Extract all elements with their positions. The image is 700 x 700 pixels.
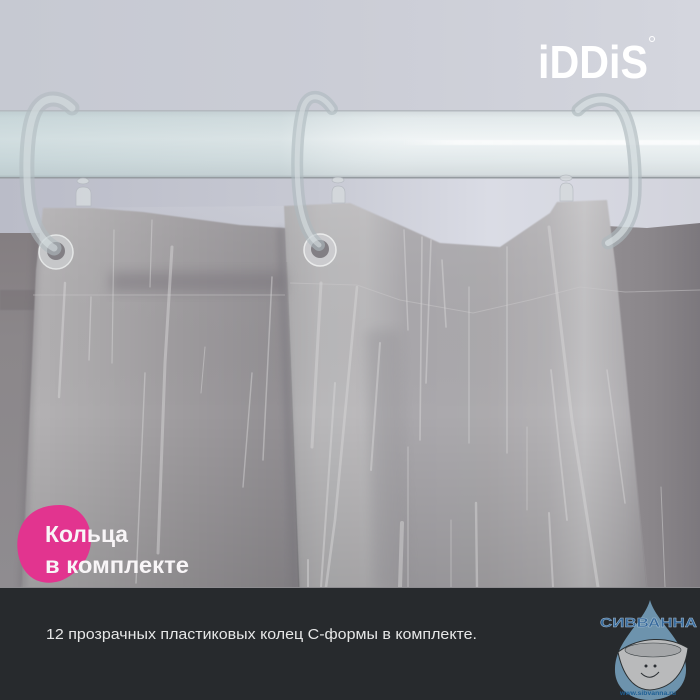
dark caption bar [0,587,700,700]
bath face [641,664,659,677]
logo url: www.sibvanna.ru [619,690,676,697]
water drop [615,600,686,700]
ring 2 with eyelet [297,97,336,266]
hook pegs [76,175,573,206]
bathtub [618,639,688,690]
curtain left panel [22,208,299,589]
badge heading line 1: Кольца [45,521,128,547]
ring 3 [578,100,635,243]
curtain vertical shading [22,200,647,589]
ring 1 with eyelet [27,99,73,269]
caption text: 12 прозрачных пластиковых колец С-формы в комплекте. [46,626,477,643]
badge: rings included [17,505,189,583]
raindrop streak pattern [59,220,665,587]
curtain right panel [284,200,647,589]
badge heading line 2: в комплекте [45,552,189,578]
shower curtain [0,200,700,589]
back folds of curtain [0,223,700,589]
brand logo: iDDiS [538,36,648,88]
watermark: Sibvanna logo [600,600,698,700]
hem stitching [33,283,700,313]
wall background [0,0,700,262]
fold shadows [18,228,410,589]
pink blob [17,505,91,583]
curtain rod [0,110,700,178]
logo wordmark: СИВВАННА [600,615,698,630]
